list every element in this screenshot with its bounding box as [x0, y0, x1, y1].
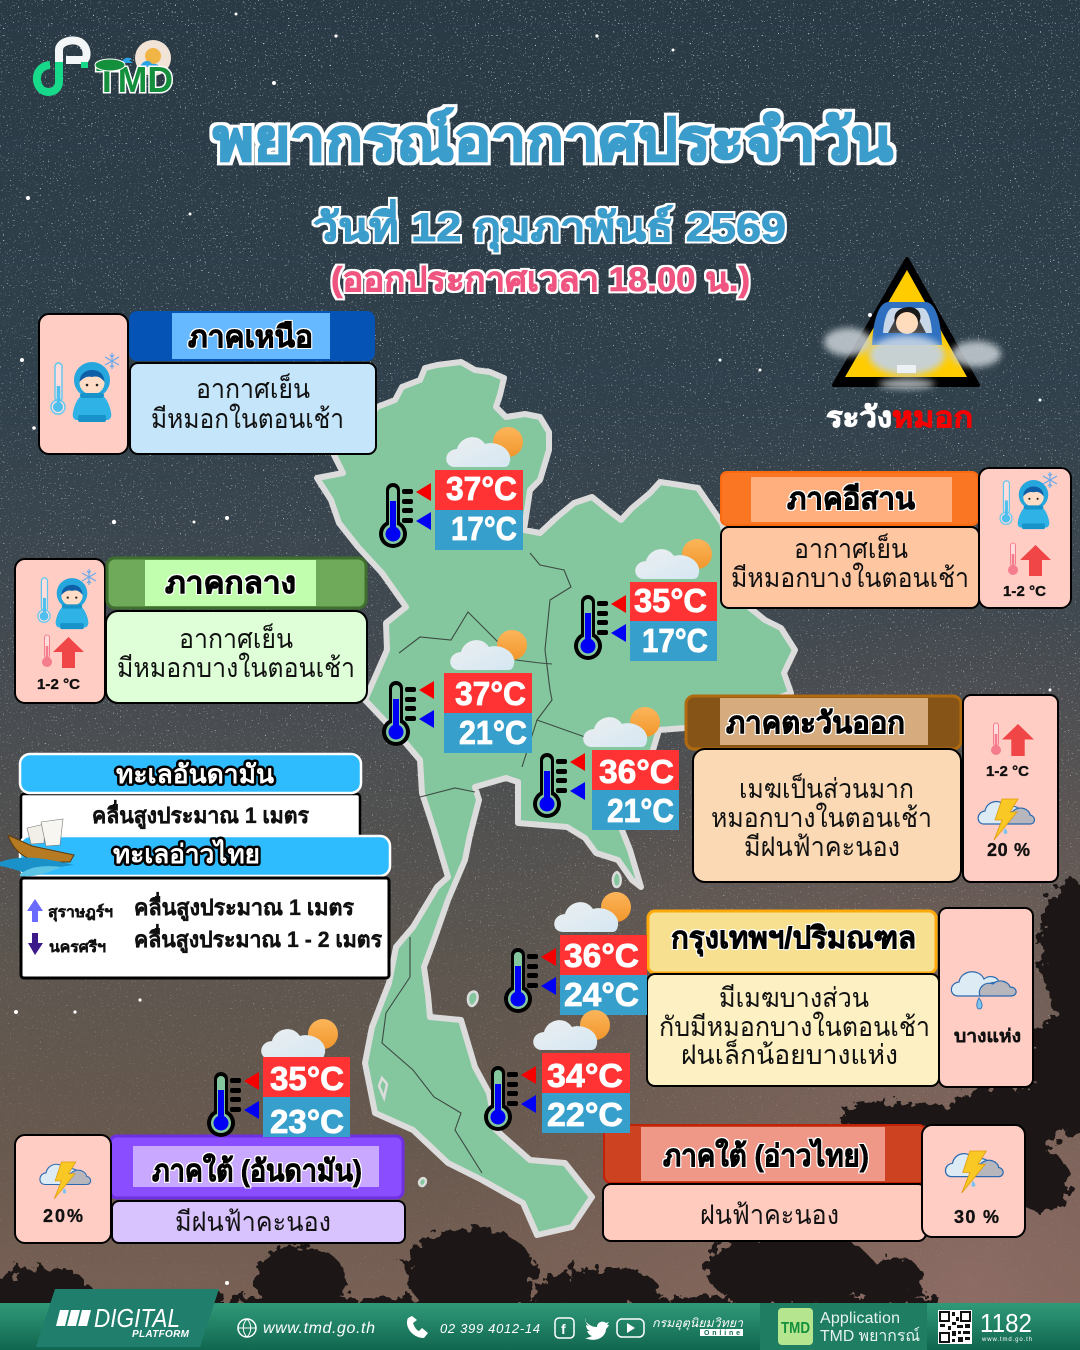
- department name: [652, 1316, 744, 1337]
- department name: Online: [704, 1330, 740, 1337]
- phone: 02 399 4012-14: [440, 1321, 540, 1336]
- south andaman header: [110, 1136, 403, 1198]
- central description: [106, 611, 367, 703]
- east header: [686, 696, 961, 749]
- east icon card: 20 %: [987, 840, 1030, 860]
- temperature: northeast: [574, 539, 717, 661]
- icon: sailing ship: [0, 819, 74, 876]
- south gulf header: [604, 1125, 926, 1183]
- east icon card: [963, 695, 1058, 882]
- date: วันที่ 12 กุมภาพันธ์ 2569: [313, 199, 786, 253]
- panel: Bangkok and vicinity: [647, 908, 1033, 1087]
- temperature: north: [379, 427, 523, 550]
- temperature: south gulf: [484, 1010, 630, 1133]
- south andaman icon card: [15, 1135, 111, 1243]
- Bangkok header: [648, 911, 936, 973]
- central header: [107, 558, 366, 608]
- gulf description: คลื่นสูงประมาณ 1 เมตร: [134, 891, 354, 922]
- digital platform badge: PLATFORM: [132, 1329, 190, 1340]
- Bangkok header: กรุงเทพฯ/ปริมณฑล: [671, 922, 916, 957]
- temperature: Bangkok: 24°C: [564, 976, 639, 1013]
- gulf description: [21, 878, 389, 978]
- temperature: east: 36°C: [599, 753, 674, 790]
- panel: Andaman Sea: [20, 754, 361, 844]
- tree silhouettes: [0, 880, 1080, 1317]
- phone: [407, 1316, 540, 1338]
- temperature: south andaman: [207, 1019, 350, 1140]
- social icons: [555, 1318, 644, 1340]
- gulf description: นครศรีฯ: [49, 939, 106, 956]
- up arrow: Surat Thani: [27, 899, 43, 922]
- gulf description: คลื่นสูงประมาณ 1 - 2 เมตร: [134, 923, 382, 954]
- central header: ภาคกลาง: [165, 567, 296, 600]
- QR code: [938, 1310, 972, 1344]
- andaman sea description: [21, 794, 360, 844]
- east description: มีฝนฟ้าคะนอง: [744, 832, 900, 862]
- footer bar: [0, 1289, 1080, 1350]
- temperature: Bangkok: 36°C: [564, 937, 639, 974]
- fog warning label: ระวัง: [826, 402, 892, 434]
- northeast description: อากาศเย็น: [794, 531, 908, 564]
- northeast description: มีหมอกบางในตอนเช้า: [731, 562, 969, 593]
- Bangkok icon card: บางแห่ง: [954, 1026, 1021, 1046]
- Bangkok description: ฝนเล็กน้อยบางแห่ง: [681, 1037, 898, 1070]
- northeast header: [721, 472, 978, 525]
- fog warning label: หมอก: [892, 402, 973, 434]
- panel: south Andaman side: [15, 1135, 405, 1243]
- gulf header: [20, 836, 390, 876]
- northeast icon card: 1-2 °C: [1003, 583, 1046, 600]
- title: พยากรณ์อากาศประจำวัน: [213, 107, 893, 173]
- logo: DF digital mark: [37, 40, 88, 92]
- app label: Application: [820, 1310, 900, 1327]
- gulf header: ทะเลอ่าวไทย: [113, 838, 260, 869]
- north header: [129, 311, 375, 361]
- app label: [820, 1310, 920, 1345]
- andaman sea header: ทะเลอันดามัน: [116, 759, 274, 789]
- temperature: south andaman: 35°C: [270, 1060, 344, 1097]
- app icon: TMD: [781, 1320, 810, 1337]
- temperature: south andaman: 23°C: [270, 1103, 344, 1140]
- temperature: northeast: 35°C: [634, 582, 707, 619]
- temperature: Bangkok: [504, 892, 647, 1015]
- Bangkok icon card: [939, 908, 1033, 1087]
- north icon card: [39, 314, 128, 454]
- north header: ภาคเหนือ: [188, 321, 313, 354]
- temperature: south gulf: 34°C: [547, 1057, 623, 1094]
- logo: TMD: TMD: [96, 59, 173, 100]
- logo: TMD: [95, 40, 173, 100]
- app icon: [778, 1308, 813, 1345]
- south andaman description: [112, 1201, 405, 1243]
- digital platform badge: [36, 1289, 219, 1347]
- north description: อากาศเย็น: [196, 371, 310, 404]
- temperature: south gulf: 22°C: [547, 1096, 623, 1133]
- social icons: f: [561, 1321, 566, 1337]
- hotline: 1182: [980, 1308, 1032, 1338]
- central icon card: [15, 559, 105, 703]
- north description: มีหมอกในตอนเช้า: [151, 403, 344, 434]
- south gulf icon card: 30 %: [954, 1207, 999, 1227]
- temperature: east: [533, 707, 679, 830]
- south andaman header: ภาคใต้ (อันดามัน): [152, 1153, 362, 1188]
- temperature: central: 21°C: [459, 714, 527, 751]
- northeast icon card: [979, 468, 1071, 608]
- east description: เมฆเป็นส่วนมาก: [739, 771, 914, 804]
- temperature: north: 37°C: [446, 470, 517, 507]
- digital platform badge: DIGITAL: [94, 1303, 180, 1333]
- east description: หมอกบางในตอนเช้า: [711, 802, 932, 833]
- central icon card: 1-2 °C: [37, 676, 80, 693]
- north description: [130, 363, 376, 454]
- temperature: northeast: 17°C: [642, 622, 708, 659]
- gulf description: สุราษฎร์ฯ: [48, 903, 113, 922]
- fog warning label: [826, 402, 973, 434]
- application panel background: [760, 1303, 927, 1350]
- panel: east: [686, 695, 1058, 882]
- temperature: central: [382, 630, 532, 753]
- south gulf header: ภาคใต้ (อ่าวไทย): [663, 1138, 869, 1173]
- andaman sea header: [20, 754, 361, 793]
- down arrow: Nakhon Si Thammarat: [28, 933, 43, 955]
- south gulf description: ฝนฟ้าคะนอง: [700, 1200, 839, 1230]
- temperature: east: 21°C: [607, 792, 674, 829]
- panel: south Gulf side: [603, 1125, 1025, 1241]
- south gulf description: [603, 1184, 926, 1241]
- east description: [693, 749, 961, 882]
- south andaman icon card: 20%: [43, 1206, 83, 1226]
- website: www.tmd.go.th: [263, 1320, 375, 1337]
- central description: มีหมอกบางในตอนเช้า: [117, 652, 355, 683]
- northeast header: ภาคอีสาน: [787, 483, 915, 516]
- icon: fog warning sign: [824, 259, 1001, 389]
- panel: central: [15, 558, 367, 703]
- panel: north: [39, 311, 376, 454]
- temperature: central: 37°C: [455, 675, 526, 712]
- panel: Gulf of Thailand: [20, 836, 390, 978]
- app label: TMD พยากรณ์: [820, 1326, 920, 1345]
- central description: อากาศเย็น: [179, 621, 293, 654]
- Bangkok description: กับมีหมอกบางในตอนเช้า: [659, 1011, 930, 1042]
- temperature: north: 17°C: [451, 510, 517, 547]
- east header: ภาคตะวันออก: [726, 707, 905, 740]
- issue time: (ออกประกาศเวลา 18.00 น.): [331, 261, 750, 299]
- east icon card: 1-2 °C: [986, 763, 1029, 780]
- Bangkok description: [647, 974, 939, 1086]
- Bangkok description: มีเมฆบางส่วน: [719, 983, 869, 1013]
- department name: กรมอุตุนิยมวิทยา: [652, 1316, 744, 1331]
- andaman sea description: คลื่นสูงประมาณ 1 เมตร: [92, 799, 309, 830]
- northeast description: [721, 527, 979, 608]
- panel: northeast: [721, 468, 1071, 608]
- hotline: www.tmd.go.th: [981, 1337, 1032, 1343]
- south andaman description: มีฝนฟ้าคะนอง: [175, 1207, 331, 1237]
- south gulf icon card: [922, 1125, 1025, 1237]
- map of Thailand: [317, 362, 795, 1235]
